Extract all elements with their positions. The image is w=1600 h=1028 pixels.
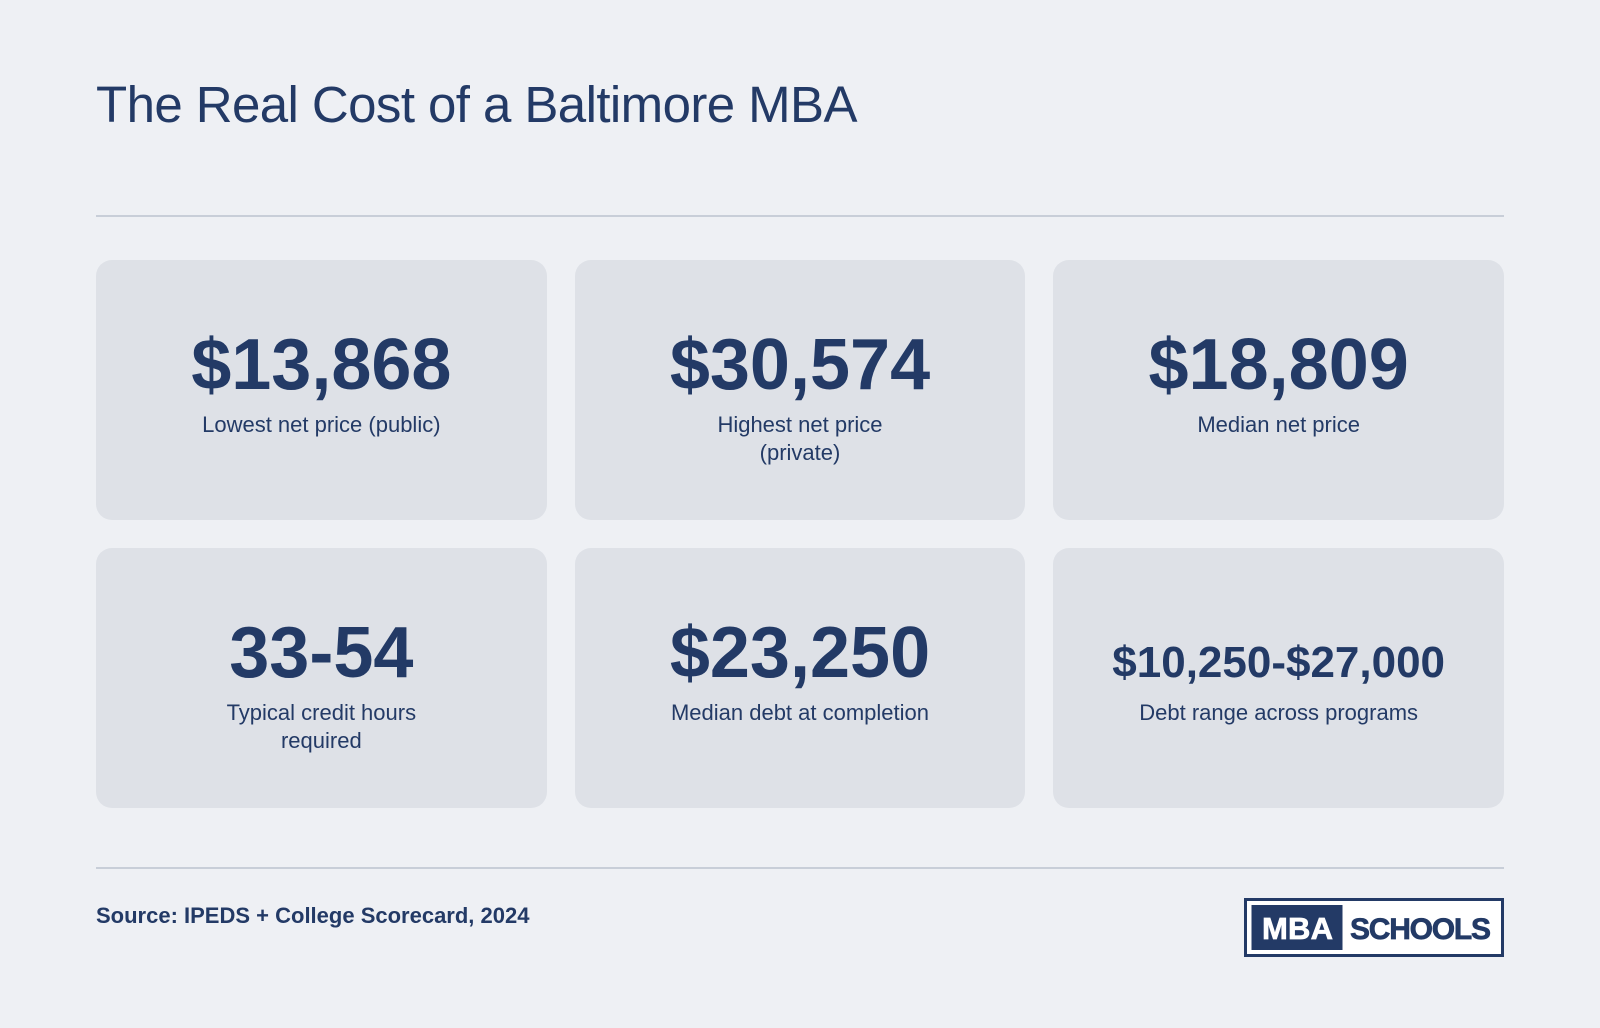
logo: MBA Schools: MBA [1262,911,1333,946]
value: $23,250 [670,613,930,693]
panel: debt range [1053,548,1504,808]
title: The Real Cost of a Baltimore MBA [96,76,857,133]
label [717,412,883,465]
label: Typical credit hours [227,700,416,725]
label: Lowest net price (public) [202,412,441,437]
value: $18,809 [1149,325,1409,405]
panel: highest net price [575,260,1025,520]
label [227,700,416,753]
value: $10,250-$27,000 [1112,638,1445,687]
label: Debt range across programs [1139,700,1418,725]
panel: median net price [1053,260,1504,520]
panel: credit hours [96,548,547,808]
value: $13,868 [191,325,451,405]
label: Median net price [1197,412,1360,437]
source note: Source: IPEDS + College Scorecard, 2024 [96,903,529,928]
value: 33-54 [229,613,413,693]
label: (private) [760,440,840,465]
label: required [281,728,362,753]
panel: lowest net price [96,260,547,520]
label: Median debt at completion [671,700,929,725]
label: Highest net price [717,412,883,437]
panel: median debt [575,548,1025,808]
logo: MBA Schools: SCHOOLS [1350,913,1491,946]
value: $30,574 [670,325,930,405]
logo: MBA Schools [1244,898,1504,957]
